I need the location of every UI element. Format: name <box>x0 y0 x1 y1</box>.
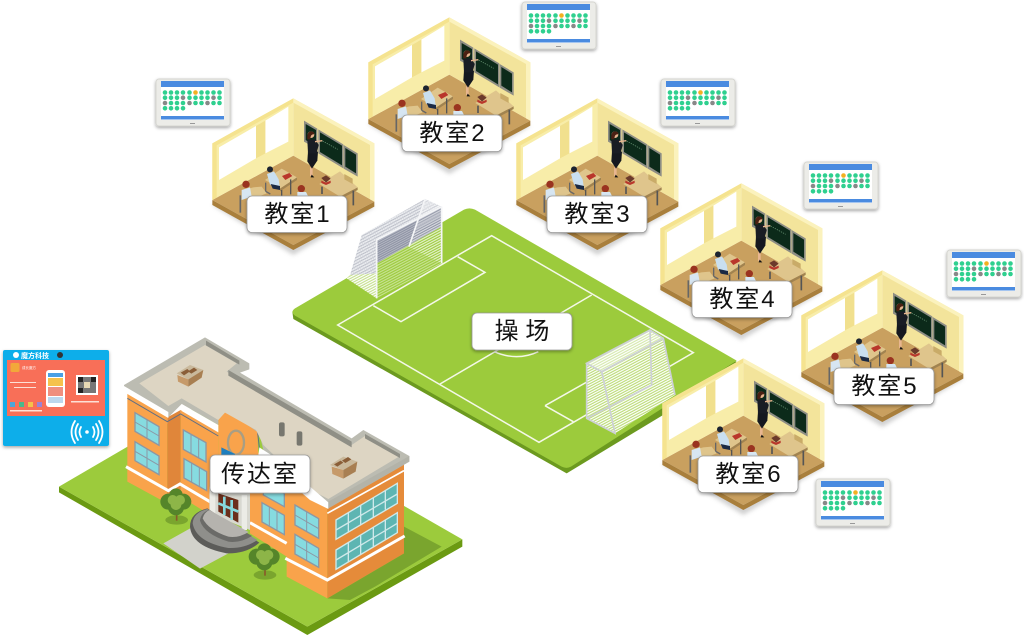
walls <box>126 393 405 598</box>
classroom 2 <box>368 17 530 174</box>
tablet 5 <box>947 250 1021 297</box>
label: classroom 5 <box>834 368 934 404</box>
label: classroom 1 <box>247 196 347 232</box>
label: classroom 4 <box>692 281 792 318</box>
trees <box>160 488 280 580</box>
card reader panel <box>3 350 109 446</box>
poster screen: 成长魔方 <box>22 365 36 370</box>
tablet 2 <box>522 2 596 49</box>
goal: bottom-right <box>587 330 675 433</box>
classroom 5 <box>801 270 963 427</box>
classroom 6 <box>662 358 824 515</box>
icon: NFC waves <box>72 421 102 443</box>
label: classroom 2 <box>402 115 502 152</box>
school building on lawn <box>59 337 462 635</box>
label: classroom 6: 教室6 <box>715 461 783 488</box>
label: playground <box>472 313 572 350</box>
label: gatehouse <box>210 455 310 493</box>
label: classroom 1: 教室1 <box>264 201 332 228</box>
goal: top-left <box>347 199 442 298</box>
brand name: 魔方科技 <box>21 351 49 360</box>
label: classroom 4: 教室4 <box>709 286 777 313</box>
label: classroom 2: 教室2 <box>419 120 487 147</box>
lawn <box>59 397 462 635</box>
steps <box>190 508 259 553</box>
entrance <box>209 431 250 530</box>
label: classroom 5: 教室5 <box>851 373 919 400</box>
roof <box>124 337 409 509</box>
tablet 1 <box>156 79 230 126</box>
classroom 3 <box>516 98 678 255</box>
label: playground: 操 场 <box>495 318 549 345</box>
tablet 3 <box>661 79 735 126</box>
classroom 1 <box>212 98 374 255</box>
field lines <box>338 236 693 442</box>
sports field <box>292 208 737 473</box>
label: classroom 3: 教室3 <box>564 201 632 228</box>
camera <box>57 352 63 358</box>
tablet 6 <box>816 479 890 526</box>
label: classroom 6 <box>698 456 798 492</box>
windows <box>135 413 397 569</box>
tablet 4 <box>804 162 878 209</box>
classroom 4 <box>660 183 822 340</box>
label: gatehouse: 传达室 <box>221 461 299 488</box>
label: classroom 3 <box>547 196 647 232</box>
